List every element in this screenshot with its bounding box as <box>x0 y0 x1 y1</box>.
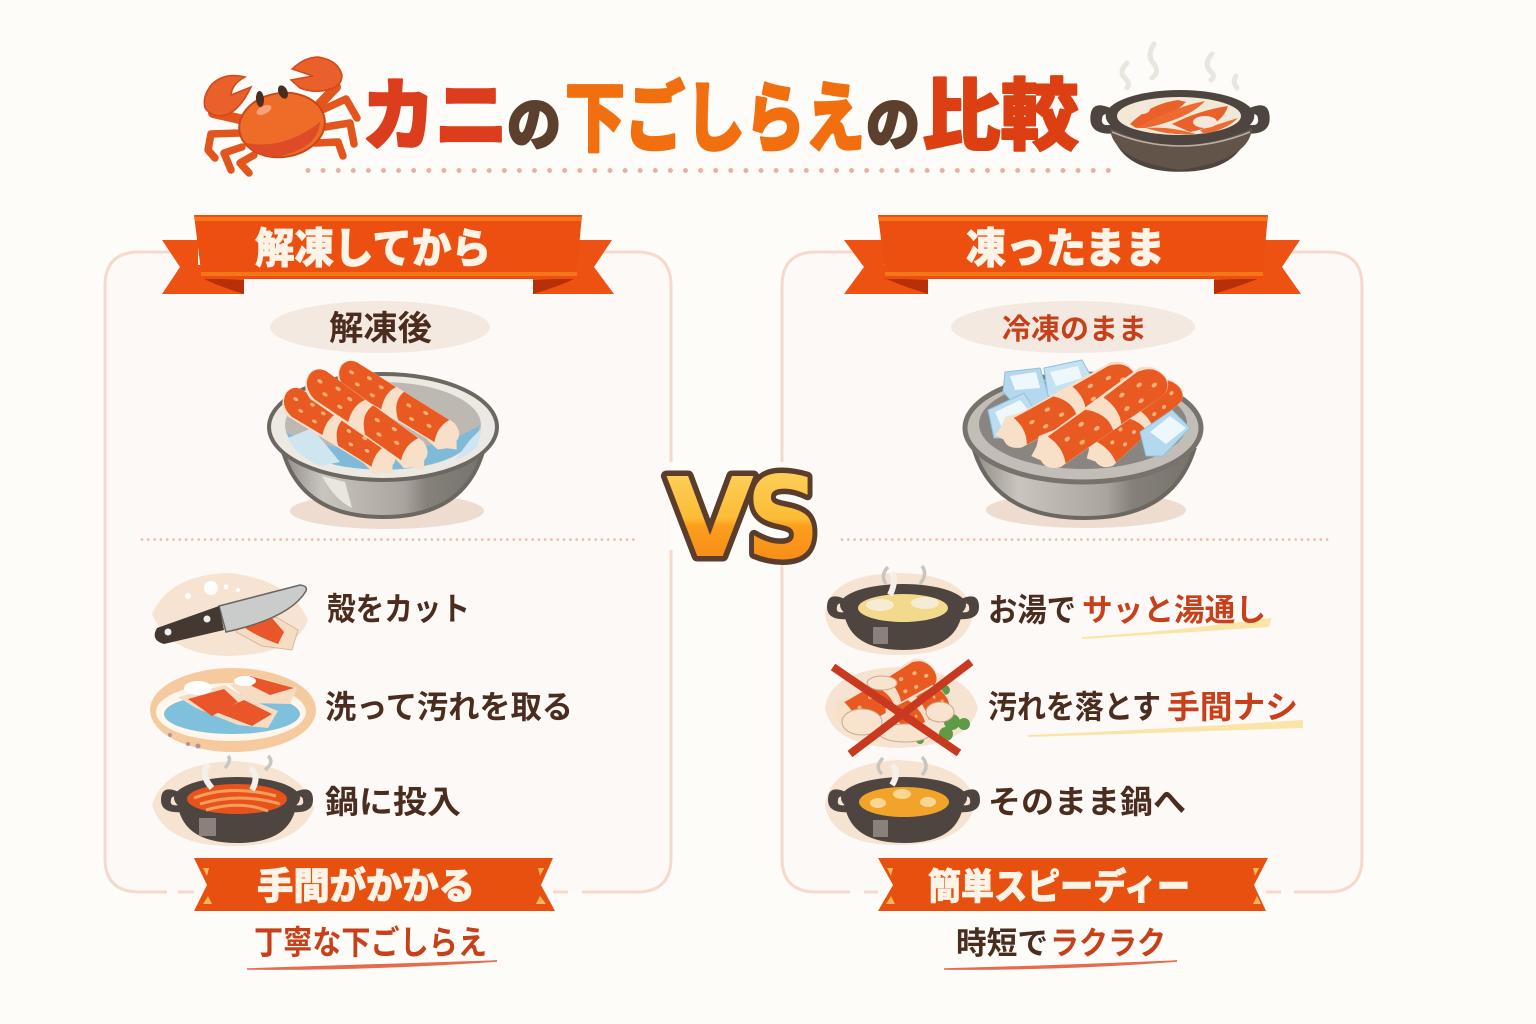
result banner: easy and speedy: 簡単スピーディー <box>928 866 1190 907</box>
title group <box>204 44 1270 173</box>
banner: thaw first: 解凍してから <box>255 225 491 272</box>
result note: time saving <box>944 925 1177 969</box>
step: straight into pot: そのまま鍋へ <box>988 784 1186 820</box>
result banner: takes effort: 手間がかかる <box>257 865 475 907</box>
result note: time saving: ラクラク <box>1050 925 1166 961</box>
title text: 下ごしらえ <box>565 77 865 162</box>
title text: 比較 <box>922 72 1079 160</box>
icon: pot of soup <box>825 757 980 845</box>
state label: after thawing <box>270 301 490 353</box>
step text <box>988 689 1302 736</box>
step: cut shell <box>152 573 470 656</box>
illustration: frozen crab legs with ice in bowl <box>965 350 1201 528</box>
title text: の <box>866 93 920 158</box>
banner: still frozen: 凍ったまま <box>966 225 1165 272</box>
result note: time saving: 時短で <box>956 926 1048 961</box>
icon: knife <box>152 573 308 656</box>
step: straight into pot <box>825 757 1186 845</box>
state label: frozen <box>951 301 1195 353</box>
step text: サッと湯通し <box>1082 593 1266 628</box>
step: no washing needed <box>825 648 1302 754</box>
step text: 手間ナシ <box>1167 689 1298 725</box>
VS badge <box>666 452 820 585</box>
step: wash: 洗って汚れを取る <box>325 689 573 725</box>
title text <box>362 72 1079 162</box>
VS badge: S <box>746 452 820 585</box>
icon: crab <box>204 57 357 173</box>
banner: thaw first <box>162 215 614 294</box>
icon: plate of crab <box>150 668 316 752</box>
step text: お湯で <box>988 592 1076 628</box>
panel: thaw first <box>105 215 671 969</box>
result banner: takes effort <box>194 858 555 911</box>
VS badge: V <box>666 454 754 582</box>
banner: still frozen <box>844 215 1301 294</box>
step: put in pot: 鍋に投入 <box>325 784 461 820</box>
panel: still frozen <box>782 215 1362 969</box>
step: wash <box>150 668 573 752</box>
icon: pot with legs <box>152 756 314 846</box>
title text: カニ <box>362 72 508 160</box>
illustration: thawed crab legs in bowl <box>269 356 497 529</box>
step text <box>988 592 1270 638</box>
title text: の <box>507 93 561 158</box>
icon: hot pot <box>1090 44 1270 172</box>
step: blanch <box>825 566 1270 655</box>
step: cut shell: 殻をカット <box>327 591 470 627</box>
result note: careful preparation: 丁寧な下ごしらえ <box>254 924 487 961</box>
step: put in pot <box>152 756 461 846</box>
state label: frozen: 冷凍のまま <box>1002 313 1147 346</box>
icon: crossed out crab legs <box>825 648 978 754</box>
icon: pot of hot water <box>825 566 979 655</box>
step text: 汚れを落とす <box>988 689 1161 725</box>
state label: after thawing: 解凍後 <box>329 310 432 348</box>
result banner: easy and speedy <box>878 858 1268 911</box>
